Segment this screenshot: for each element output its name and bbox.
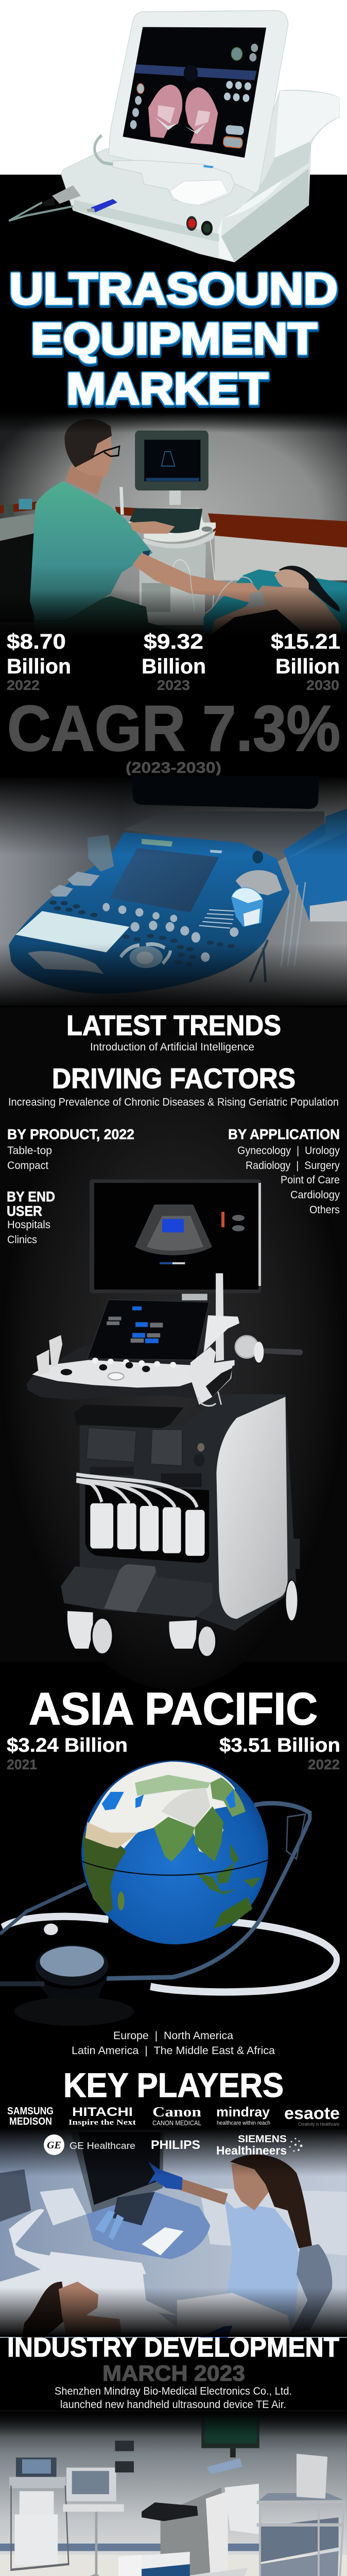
foot rest: [61, 1565, 213, 1618]
logo: hitachi: [68, 2105, 136, 2127]
hero ultrasound device: [9, 10, 340, 262]
title face: EQUIPMENT: [31, 314, 317, 364]
speaker: [252, 851, 263, 863]
logo: samsung medison: [7, 2106, 54, 2127]
machine body: [44, 2251, 177, 2315]
2022 value: [7, 630, 71, 693]
patient bed: [203, 569, 347, 638]
counter: [199, 2188, 347, 2256]
title outline: ULTRASOUND: [9, 264, 338, 314]
control deck: [27, 1346, 241, 1400]
blue box: [141, 2556, 190, 2576]
by application segment: Gynecology | Urology: [237, 1145, 340, 1157]
sliders: [199, 910, 235, 928]
gel holder: [236, 870, 282, 895]
asia pacific heading: ASIA PACIFIC: [29, 1683, 318, 1734]
2022 value: 2022: [7, 677, 40, 693]
title face: ULTRASOUND: [9, 264, 338, 314]
by application segment: [228, 1126, 340, 1216]
wall band: [0, 2544, 261, 2551]
nurse hair: [230, 2155, 314, 2256]
2023 value: 2023: [157, 677, 190, 693]
by end user segment: Clinics: [7, 1234, 37, 1246]
gel cup: [235, 1336, 258, 1358]
white side panel: [216, 1397, 288, 1619]
black stats band: [0, 636, 347, 778]
logo: esaote: esaote: [284, 2104, 340, 2123]
logo: ge healthcare: GE: [47, 2140, 61, 2151]
wheels: [67, 1611, 93, 1649]
wall: [0, 412, 347, 641]
by application segment: Others: [309, 1204, 340, 1216]
dark concentric backdrop: [0, 1007, 347, 1690]
nurse face: [231, 2164, 269, 2211]
africa: [83, 1825, 126, 1914]
left top wall items: [115, 2441, 134, 2451]
asia pacific 2021 value: [7, 1735, 128, 1772]
machine rear block: [124, 811, 325, 861]
console photo bottom fade: [0, 943, 347, 1010]
2030 value: $15.21: [271, 630, 340, 653]
doctor trousers: [33, 596, 184, 649]
console deck: [86, 2192, 210, 2259]
title shadow: ULTRASOUND: [10, 266, 338, 316]
touch screen: [88, 1299, 209, 1360]
photo bottom fade: [0, 2287, 347, 2337]
device cradle and base: [61, 90, 340, 262]
2023 value: [142, 630, 206, 693]
console deck: [9, 832, 290, 994]
by application segment: Cardiology: [290, 1189, 340, 1201]
patient face: [59, 2282, 122, 2336]
monitor stand: [182, 1294, 207, 1300]
ultrasound image: [135, 1205, 212, 1255]
console backdrop: [0, 777, 347, 1006]
company logos: [7, 2104, 340, 2157]
room backdrop: [0, 2128, 347, 2338]
logo: canon: Canon: [152, 2104, 201, 2120]
mountain highlight: [162, 1788, 210, 1827]
title shadow: MARKET: [67, 366, 269, 416]
handheld probe: [113, 160, 235, 205]
doctor arm: [133, 553, 261, 603]
key players heading: KEY PLAYERS: [63, 2066, 284, 2104]
cover panels: [86, 1428, 136, 1462]
cart monitor: [90, 1179, 261, 1293]
2030 value: [271, 630, 340, 693]
trays: [67, 872, 99, 886]
centre machine: [161, 2487, 228, 2575]
doctor neck and head: [65, 465, 104, 495]
other regions list: Latin America | The Middle East & Africa: [72, 2045, 275, 2057]
cable bundle: [76, 1475, 197, 1507]
development date: MARCH 2023: [102, 2361, 245, 2386]
by end user segment: BY END: [7, 1189, 55, 1205]
logo: samsung medison: MEDISON: [9, 2116, 52, 2127]
hero white band: [0, 0, 347, 175]
logo: mindray: mindray: [216, 2104, 270, 2120]
by end user segment: Hospitals: [7, 1219, 50, 1231]
cart: [140, 544, 206, 625]
title face: MARKET: [66, 364, 268, 414]
photo fade to black: [0, 590, 347, 636]
development description: launched new handheld ultrasound device TE Air.: [60, 2399, 286, 2411]
blue glove: [148, 2162, 183, 2190]
side handle: [263, 1348, 303, 1355]
right holster: [190, 1347, 232, 1405]
logo: esaote: Creativity in Healthcare: [298, 2122, 339, 2127]
logo: canon: [152, 2104, 201, 2127]
doppler box: [162, 1219, 184, 1232]
top photo shading: [0, 412, 347, 433]
cables: [281, 882, 305, 967]
monitor frame: [71, 2132, 164, 2214]
faces on screen: [148, 84, 182, 138]
logo: philips: PHILIPS: [151, 2138, 200, 2152]
patient hair: [22, 2282, 66, 2338]
probe in hand: [248, 591, 266, 608]
photo: sonographer with patient: [0, 412, 347, 649]
driving factors text: Increasing Prevalence of Chronic Diseases & Rising Geriatric Population: [8, 1096, 339, 1108]
chest piece: [36, 1945, 109, 1986]
by application segment: Point of Care: [281, 1174, 340, 1186]
equipment photo top fade: [0, 2411, 347, 2437]
logo: hitachi: HITACHI: [72, 2105, 133, 2119]
lower wall: [215, 536, 347, 581]
device screen: [123, 27, 266, 158]
asia pacific 2022 value: 2022: [308, 1757, 340, 1772]
body dark: [80, 1394, 297, 1631]
stethoscope front: [106, 1803, 310, 1978]
europe seas: [102, 1792, 124, 1810]
by application segment: BY APPLICATION: [228, 1126, 340, 1142]
driving factors heading: DRIVING FACTORS: [52, 1062, 296, 1094]
market values: [7, 630, 340, 693]
small buttons: [49, 901, 235, 967]
logo: hitachi: Inspire the Next: [68, 2119, 136, 2127]
upright probe: [216, 1273, 224, 1361]
nurse arm: [179, 2179, 228, 2205]
by product segment: [7, 1126, 134, 1172]
logo: samsung medison: SAMSUNG: [7, 2106, 54, 2117]
2023 value: Billion: [142, 654, 206, 678]
monitor: [135, 431, 209, 490]
monitor: [79, 2132, 161, 2205]
right cart: [257, 2493, 345, 2502]
probe on console: [231, 887, 263, 927]
keyboard tray: [74, 1405, 184, 1428]
deck knobs: [92, 1358, 176, 1368]
logo: mindray: healthcare within reach: [217, 2120, 270, 2126]
title: [9, 264, 338, 416]
logo: siemens healthineers: SIEMENS: [238, 2134, 287, 2145]
side buttons on screen: [137, 83, 144, 94]
title shadow: EQUIPMENT: [31, 316, 318, 366]
title face: [9, 264, 338, 414]
CAGR period: (2023-2030): [126, 759, 221, 776]
by product segment: BY PRODUCT, 2022: [7, 1126, 134, 1142]
logo: canon: CANON MEDICAL: [152, 2119, 201, 2127]
keyboard: [207, 2458, 242, 2475]
by end user segment: [7, 1189, 55, 1246]
right cart body: [283, 808, 347, 922]
2022 value: Billion: [7, 654, 71, 678]
title outline: MARKET: [66, 364, 268, 414]
bottle: [88, 835, 114, 872]
scan button: [231, 47, 242, 60]
right rear cabinet: [297, 2454, 327, 2499]
by product segment: Compact: [7, 1160, 48, 1172]
globe ocean: [81, 1760, 268, 1944]
device screen bezel: [109, 10, 288, 193]
console screen: [110, 848, 219, 912]
latest trends heading: LATEST TRENDS: [66, 1009, 281, 1041]
stethoscope tube behind: [2, 1917, 337, 1992]
2023 value: $9.32: [144, 630, 203, 653]
globe equator: [82, 1860, 268, 1875]
latest trends text: Introduction of Artificial Intelligence: [90, 1041, 254, 1053]
touch buttons: [132, 1307, 159, 1343]
asia pacific 2021 value: $3.24 Billion: [7, 1735, 128, 1756]
patient pillow: [0, 2268, 181, 2338]
by product segment: Table-top: [7, 1145, 52, 1157]
asia pacific 2022 value: [219, 1735, 340, 1772]
by application segment: Radiology | Surgery: [246, 1160, 340, 1172]
photo top fade: [0, 2128, 347, 2177]
islands: [196, 1843, 261, 1894]
probes on rack: [90, 1503, 205, 1556]
development description: [55, 2385, 292, 2411]
room: [0, 2411, 347, 2576]
knobs: [102, 903, 238, 962]
patient face and body: [274, 569, 309, 591]
other regions list: Europe | North America: [113, 2030, 233, 2042]
2022 value: $8.70: [7, 630, 66, 653]
doctor scrubs: [30, 481, 153, 620]
console photo top fade: [0, 775, 347, 855]
left shelf equipment: [0, 2170, 31, 2222]
power buttons: [186, 216, 197, 231]
second monitor: [66, 2468, 116, 2501]
patient hair: [279, 566, 340, 612]
title shadow: [10, 266, 338, 416]
connector and cable: [52, 185, 81, 204]
photo: blue ultrasound console: [0, 777, 347, 1006]
monitor frame: [90, 1179, 261, 1293]
india and southeast asia: [154, 1817, 195, 1861]
eurasia land: [86, 1761, 237, 1856]
asia pacific 2021 value: 2021: [7, 1757, 37, 1772]
probe bay: [85, 1485, 209, 1563]
development description: Shenzhen Mindray Bio-Medical Electronics Co., Ltd.: [55, 2385, 292, 2397]
photo: sonographer and smiling patient: [0, 2128, 347, 2338]
desk: [0, 513, 38, 541]
usb stick: [91, 199, 117, 212]
other regions list: [72, 2030, 275, 2057]
title outline: [9, 264, 338, 414]
logo: mindray: [216, 2104, 270, 2126]
nurse uniform: [221, 2199, 300, 2330]
palm rest: [28, 951, 104, 974]
floor: [0, 2555, 347, 2576]
logo: siemens healthineers: Healthineers: [216, 2144, 287, 2157]
asia pacific 2022 value: $3.51 Billion: [219, 1735, 340, 1756]
rear black monitor: [132, 776, 319, 809]
photo: medical equipment room: [0, 2411, 347, 2576]
logo: ge healthcare: GE Healthcare: [70, 2141, 135, 2151]
left cart: [16, 2458, 57, 2477]
wall monitor: [201, 2414, 259, 2448]
keyboard: [15, 911, 129, 952]
by end user segment: USER: [7, 1203, 42, 1219]
title outline: EQUIPMENT: [31, 314, 317, 364]
cart ultrasound system: [27, 1273, 303, 1657]
trackball: [129, 946, 163, 968]
chair: [290, 2244, 332, 2334]
globe on stethoscope: [0, 1760, 337, 2026]
logo: siemens healthineers: [216, 2134, 303, 2157]
2030 value: 2030: [306, 677, 339, 693]
left probes: [37, 1335, 62, 1375]
logo: ge healthcare: [44, 2134, 135, 2155]
2030 value: Billion: [275, 654, 340, 678]
table: [63, 2504, 124, 2512]
orange wall stripe: [0, 501, 347, 548]
